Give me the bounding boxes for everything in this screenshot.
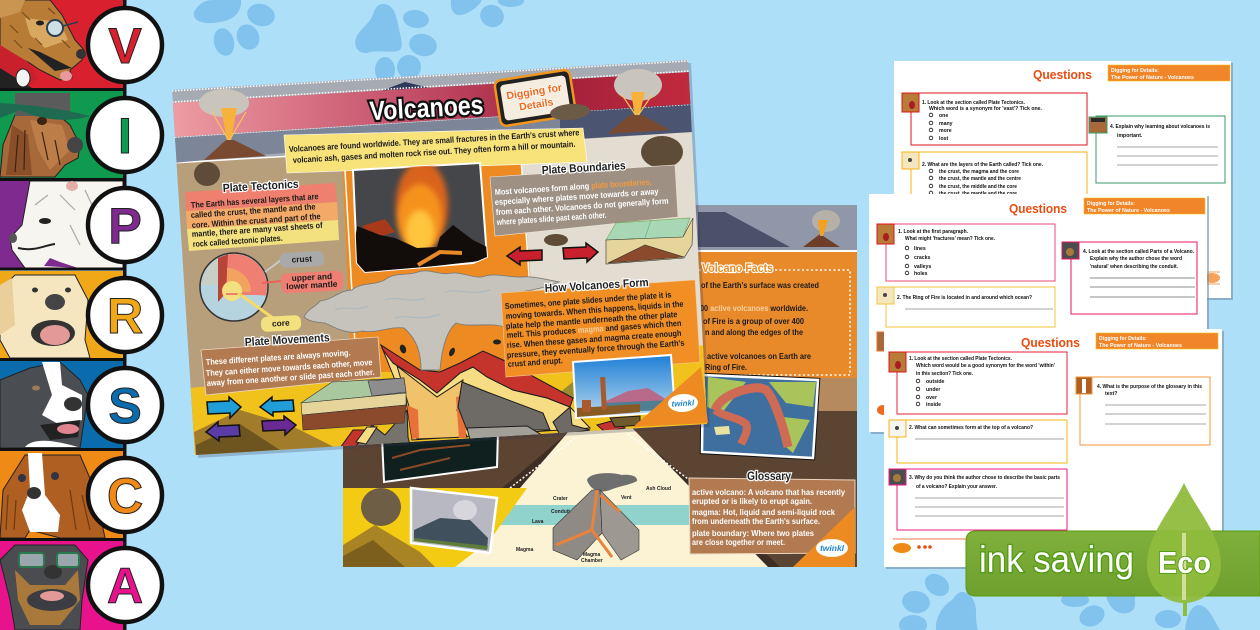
poster page 1 (front): [165, 55, 715, 460]
dark lava photo: [382, 430, 498, 482]
heading: plate movements: Plate Movements: [244, 332, 330, 349]
question 1: under: [926, 387, 940, 393]
text: ink saving: ink saving: [979, 539, 1134, 580]
title tab: The Power of Nature - Volcanoes: [1099, 343, 1182, 349]
heading: questions: Questions: [1009, 201, 1067, 216]
cream pyramid: [455, 428, 768, 567]
question 2: the crust, the middle and the core: [939, 184, 1017, 190]
glossary definitions: erupted or is likely to erupt again.: [692, 496, 812, 506]
worksheet C: [884, 329, 1224, 569]
text box: plate boundaries: from each other. Volcanoes do not generally form: [495, 196, 669, 217]
question 1: lines: [914, 246, 926, 252]
text box: how volcanoes form: [501, 280, 700, 377]
volcano parts diagram: Crater: [553, 496, 568, 502]
fact lines: 00 active volcanoes worldwide.: [700, 303, 808, 313]
left tan column: [170, 153, 355, 455]
footer logo and dots: [893, 539, 967, 553]
question 1: inside: [926, 402, 941, 408]
fact lines: [700, 280, 819, 372]
icon: leaf drop: [1147, 483, 1221, 616]
question 4: important.: [1117, 133, 1143, 139]
text box: plate tectonics: [185, 183, 339, 251]
question 1: valleys: [914, 264, 931, 270]
volcano cross-section: [340, 345, 640, 448]
badge: digging for details: Details: [518, 96, 554, 114]
corner with twinkl logo: [633, 367, 708, 427]
question 2: the crust, the mantle and the core: [939, 191, 1017, 197]
question 4: [1076, 377, 1210, 445]
ash blot: [361, 488, 401, 526]
title tab: [1108, 65, 1230, 81]
text box: plate boundaries: Most volcanoes form along plate boundaries,: [494, 177, 652, 197]
volcano parts diagram: Magma: [516, 547, 533, 553]
plate block diagram: [301, 378, 406, 430]
text box: how volcanoes form: plate help the mantle underneath the other plate: [505, 309, 678, 331]
heading: questions: Questions: [1021, 335, 1080, 350]
question 3 avatar: [877, 332, 887, 351]
volcano parts diagram: Chamber: [581, 558, 603, 564]
question 4: 4. Look at the section called Parts of a Volcano.: [1083, 249, 1195, 255]
question 1: 1. Look at the section called Plate Tectonics.: [909, 356, 1013, 362]
volcano parts diagram: [516, 473, 671, 564]
band R: golden dog: [0, 271, 123, 358]
text box: plate tectonics: core. Within the crust and part of the: [191, 211, 321, 230]
question 2: 2. What are the layers of the Earth called? Tick one.: [922, 162, 1044, 168]
corner with twinkl logo: twinkl: [820, 543, 845, 553]
letter V: V: [108, 18, 142, 74]
question 1: lost: [939, 136, 948, 142]
worksheet B: [869, 194, 1209, 434]
question 4: 4. Explain why learning about volcanoes is: [1110, 124, 1210, 130]
question 1: [902, 93, 1087, 145]
question 1: outside: [926, 379, 945, 385]
band S: collie dog: [0, 361, 123, 448]
text box: plate movements: They can either move towards each other, move: [205, 357, 373, 378]
question 3: of a volcano? Explain your answer.: [916, 484, 998, 490]
earth layers diagram: [200, 250, 282, 321]
eruption photo: [352, 161, 488, 274]
boundary block diagram: [606, 218, 693, 264]
plate movements section: [201, 332, 406, 441]
question 1: cracks: [914, 255, 931, 261]
intro text box: volcanic ash, gases and molten rock rise out. They often form a hill or mountain.: [293, 139, 576, 165]
letter A: [88, 548, 162, 622]
question 1: many: [939, 121, 953, 127]
question 1: more: [939, 128, 952, 134]
question 1: [889, 352, 1067, 414]
map: ring of fire: [702, 375, 818, 458]
arrow: purple left: [206, 422, 240, 441]
text box: plate tectonics: called the crust, the mantle and the: [190, 201, 316, 220]
badge rock: [549, 102, 591, 122]
text box: how volcanoes form: melt. This produces magma and gases which then: [506, 318, 682, 340]
badge: digging for details: [494, 69, 576, 127]
heading: plate boundaries: Plate Boundaries: [541, 160, 626, 177]
corner with twinkl logo: twinkl: [671, 398, 695, 409]
text box: plate tectonics: mantle, there are many vast sheets of: [191, 220, 323, 239]
text box: plate movements: [201, 337, 381, 395]
glossary definitions: from underneath the Earth's surface.: [692, 516, 820, 526]
volcano parts diagram: Conduit: [551, 509, 570, 515]
label: upper and lower mantle: [281, 270, 344, 294]
question 2: [902, 152, 1087, 202]
question 1: [877, 224, 1055, 281]
question 1: Which word is a synonym for 'vast'? Tick one.: [929, 106, 1043, 112]
fact lines: n and along the edges of the: [705, 327, 803, 337]
title tab: [1096, 333, 1218, 349]
teal strip: [499, 505, 689, 525]
ash cloud: [304, 271, 559, 370]
question 3: 3. Why do you think the author chose to describe the basic parts: [909, 475, 1060, 481]
question 1: 1. Look at the section called Plate Tectonics.: [922, 100, 1026, 106]
heading: plate tectonics: Plate Tectonics: [222, 179, 299, 195]
letter P: P: [108, 198, 142, 254]
volcano parts diagram: Vent: [621, 495, 632, 501]
letter C: C: [107, 468, 143, 524]
text box: plate boundaries: especially where plates move towards or away: [494, 186, 659, 207]
letter V: [88, 8, 162, 82]
question 1: What might 'fractures' mean? Tick one.: [905, 236, 996, 242]
letter S: S: [108, 378, 142, 434]
band V: airedale dog: [0, 0, 123, 88]
label: upper and lower mantle: upper and: [291, 271, 332, 283]
band sky mountain: [590, 72, 692, 132]
letter I: [88, 98, 162, 172]
left volcano illustration: [199, 89, 266, 160]
band P: white dog: [0, 181, 123, 268]
question 1: one: [939, 113, 948, 119]
question 1: over: [926, 395, 937, 401]
letter A: A: [107, 558, 143, 614]
question 4: Explain why the author chose the word: [1090, 256, 1182, 262]
letter R: R: [107, 288, 143, 344]
fact lines: of Fire is a group of over 400: [703, 316, 804, 326]
how volcanoes form section: [501, 277, 708, 427]
question 4: 'natural' when describing the conduit.: [1090, 264, 1179, 270]
yellow ground: [190, 345, 707, 456]
band A: rottweiler dog: [0, 541, 123, 630]
ash blots: [194, 136, 683, 246]
text box: plate movements: away from one another or slide past each other.: [206, 367, 375, 388]
question 1: 1. Look at the first paragraph.: [898, 229, 969, 235]
text: Eco: Eco: [1158, 545, 1211, 580]
pompeii photo: [573, 355, 675, 418]
band C: spaniel dog: [0, 451, 123, 538]
band I: hound with hat: [0, 91, 123, 178]
panel: glossary: [689, 471, 855, 554]
question 2: the crust, the magma and the core: [939, 169, 1019, 175]
question 4: [1089, 116, 1225, 183]
arrow: blue left: [260, 397, 294, 416]
title: Volcanoes: [369, 90, 484, 126]
eco ink saving banner: [966, 483, 1260, 616]
glossary definitions: plate boundary: Where two plates: [692, 528, 814, 538]
volcano parts diagram: Magma: [583, 552, 600, 558]
heading: how volcanoes form: How Volcanoes Form: [544, 277, 649, 295]
title tab: [1084, 198, 1205, 214]
centre orange column: [342, 164, 532, 372]
VIPERS strip: [0, 0, 162, 630]
plate tectonics section: [185, 179, 344, 332]
heading: volcano facts: Volcano Facts: [702, 263, 773, 275]
corner with twinkl logo: [793, 507, 855, 567]
plate boundaries section: [490, 160, 693, 265]
panel: volcano facts: [685, 252, 857, 411]
fact lines: active volcanoes on Earth are: [707, 351, 811, 361]
glossary definitions: magma: Hot, liquid and semi-liquid rock: [692, 507, 835, 517]
badge: digging for details: Digging for: [506, 82, 563, 102]
poster page 2 (behind): [343, 205, 857, 567]
question 1: holes: [914, 271, 928, 277]
label: core: [261, 315, 301, 332]
right beige column: [520, 132, 708, 400]
question 2: 2. The Ring of Fire is located in and around which ocean?: [897, 295, 1032, 301]
question 2: 2. What can sometimes form at the top of a volcano?: [909, 425, 1033, 431]
intro text box: Volcanoes are found worldwide. They are small fractures in the Earth's crust where: [289, 127, 580, 154]
title tab: Digging for Details:: [1111, 68, 1159, 74]
text box: plate tectonics: rock called tectonic plates.: [192, 233, 283, 249]
twinkl logo small: [1204, 272, 1220, 284]
text box: plate boundaries: [490, 165, 678, 236]
glossary definitions: active volcano: A volcano that has recently: [692, 487, 845, 497]
intro text box: [284, 127, 587, 173]
label: upper and lower mantle: lower mantle: [286, 279, 338, 291]
heading: glossary: Glossary: [747, 471, 792, 483]
volcano parts diagram: Lava: [532, 519, 544, 525]
arrow: red right: [563, 243, 598, 262]
heading: questions: Questions: [1033, 67, 1092, 82]
lava drops: [399, 340, 501, 357]
small volcano illustration: [803, 210, 840, 247]
text box: how volcanoes form: crust and erupt.: [507, 355, 563, 369]
label: crust: [280, 251, 324, 268]
title tab: The Power of Nature - Volcanoes: [1087, 208, 1170, 214]
text box: how volcanoes form: moving towards. When this happens, liquids in the: [505, 299, 684, 321]
label: crust: crust: [291, 253, 313, 265]
question 1: in this section? Tick one.: [916, 371, 974, 377]
question 3: [889, 469, 1067, 530]
arrow: purple right: [262, 416, 296, 435]
title tab: The Power of Nature - Volcanoes: [1111, 75, 1194, 81]
header banner: [172, 72, 692, 137]
right volcano illustration: [607, 69, 670, 134]
letter C: [88, 458, 162, 532]
letter S: [88, 368, 162, 442]
question 1: Which word would be a good synonym for the word 'within': [916, 363, 1055, 369]
text box: how volcanoes form: pressure, they eventually force through the Earth's: [506, 338, 685, 360]
lower left ground: [343, 488, 527, 567]
volcano parts diagram: Ash Cloud: [646, 486, 671, 492]
arrow: red left: [507, 247, 542, 265]
question 2: [889, 420, 1067, 463]
fact lines: of the Earth's surface was created: [701, 280, 819, 290]
letter P: [88, 188, 162, 262]
arrow: blue right: [207, 397, 241, 418]
letter I: I: [118, 108, 132, 164]
glossary definitions: are close together or meet.: [692, 537, 785, 547]
text box: plate boundaries: where plates slide past each other.: [496, 210, 607, 227]
question 2: [877, 287, 1055, 327]
fact lines: Ring of Fire.: [705, 362, 747, 372]
question 2: the crust, the mantle and the centre: [939, 176, 1021, 182]
question 4: [1062, 242, 1197, 314]
title tab: Digging for Details:: [1099, 336, 1147, 342]
question 4: text?: [1105, 391, 1117, 397]
text box: plate movements: These different plates are always moving.: [205, 347, 351, 367]
road bands: [502, 434, 780, 567]
text box: how volcanoes form: rise. When these gases and magma create enough: [506, 328, 682, 350]
twinkl logo small: [877, 405, 889, 415]
question 4: 4. What is the purpose of the glossary in this: [1097, 384, 1202, 390]
glossary definitions: [692, 487, 845, 547]
letter R: [88, 278, 162, 352]
text box: how volcanoes form: Sometimes, one plate slides under the plate it is: [504, 289, 672, 311]
text box: plate tectonics: The Earth has several layers that are: [190, 191, 319, 210]
label: core: core: [272, 318, 290, 328]
title tab: Digging for Details:: [1087, 201, 1135, 207]
worksheet A: [894, 61, 1233, 300]
mountain photo: [411, 488, 497, 553]
